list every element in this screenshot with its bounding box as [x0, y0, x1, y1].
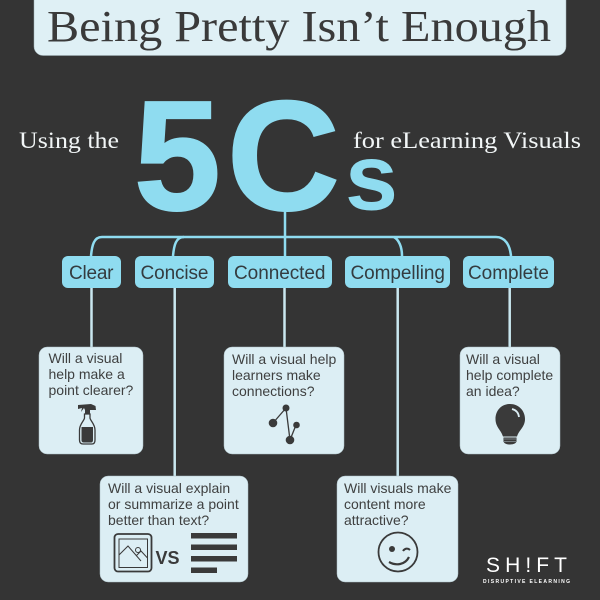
panel: connected — [224, 347, 344, 454]
heading: Complete — [463, 256, 554, 288]
panel: complete: an idea? — [466, 383, 520, 399]
heading: Concise: Concise — [140, 263, 208, 284]
panel: concise — [100, 476, 248, 582]
icon: light bulb — [496, 404, 525, 444]
subtitle: using the 5Cs for eLearning visuals — [19, 70, 581, 244]
panel: compelling: attractive? — [344, 512, 409, 528]
panel: connected: connections? — [232, 383, 315, 399]
icon: spray bottle — [78, 404, 96, 444]
heading: Complete: Complete — [468, 263, 549, 284]
label: vs: VS — [156, 548, 180, 568]
subtitle: using the 5Cs for eLearning visuals: for eLearning Visuals — [353, 128, 581, 153]
icon: text lines — [191, 533, 237, 573]
panel: clear: point clearer? — [48, 382, 134, 398]
heading: Clear: Clear — [69, 263, 114, 284]
panel: connected: learners make — [232, 367, 321, 383]
heading: Connected: Connected — [234, 263, 326, 284]
panel: complete: Will a visual — [466, 351, 540, 367]
panel: complete: help complete — [466, 367, 553, 383]
panel: complete — [460, 347, 560, 454]
stems from headings to cards — [92, 288, 510, 477]
heading: Connected — [228, 256, 332, 288]
heading: Clear — [62, 256, 121, 288]
panel: clear — [39, 347, 143, 454]
connector tree — [91, 209, 511, 256]
icon: network nodes — [269, 404, 300, 444]
panel: compelling — [337, 476, 458, 582]
panel: clear: Will a visual — [48, 350, 122, 366]
icon: picture — [114, 534, 152, 572]
subtitle: using the 5Cs for eLearning visuals: s — [345, 124, 398, 230]
panel: concise: or summarize a point — [108, 496, 239, 512]
panel: concise: Will a visual explain — [108, 480, 230, 496]
logo: SHIFT — [483, 554, 570, 585]
subtitle: using the 5Cs for eLearning visuals: Using the — [19, 128, 119, 153]
icon: winking face — [378, 532, 418, 572]
title: Being Pretty Isn’t Enough — [47, 2, 551, 51]
logo: SHIFT: SH!FT — [486, 554, 567, 577]
heading: Compelling: Compelling — [350, 263, 445, 284]
heading: Concise — [135, 256, 214, 288]
panel: clear: help make a — [48, 366, 125, 382]
panel: compelling: Will visuals make — [344, 480, 452, 496]
panel: compelling: content more — [344, 496, 426, 512]
subtitle: using the 5Cs for eLearning visuals: 5C — [134, 70, 340, 244]
heading: Compelling — [345, 256, 450, 288]
panel: concise: better than text? — [108, 512, 209, 528]
panel: connected: Will a visual help — [232, 351, 336, 367]
logo: SHIFT: DISRUPTIVE ELEARNING — [483, 579, 570, 585]
